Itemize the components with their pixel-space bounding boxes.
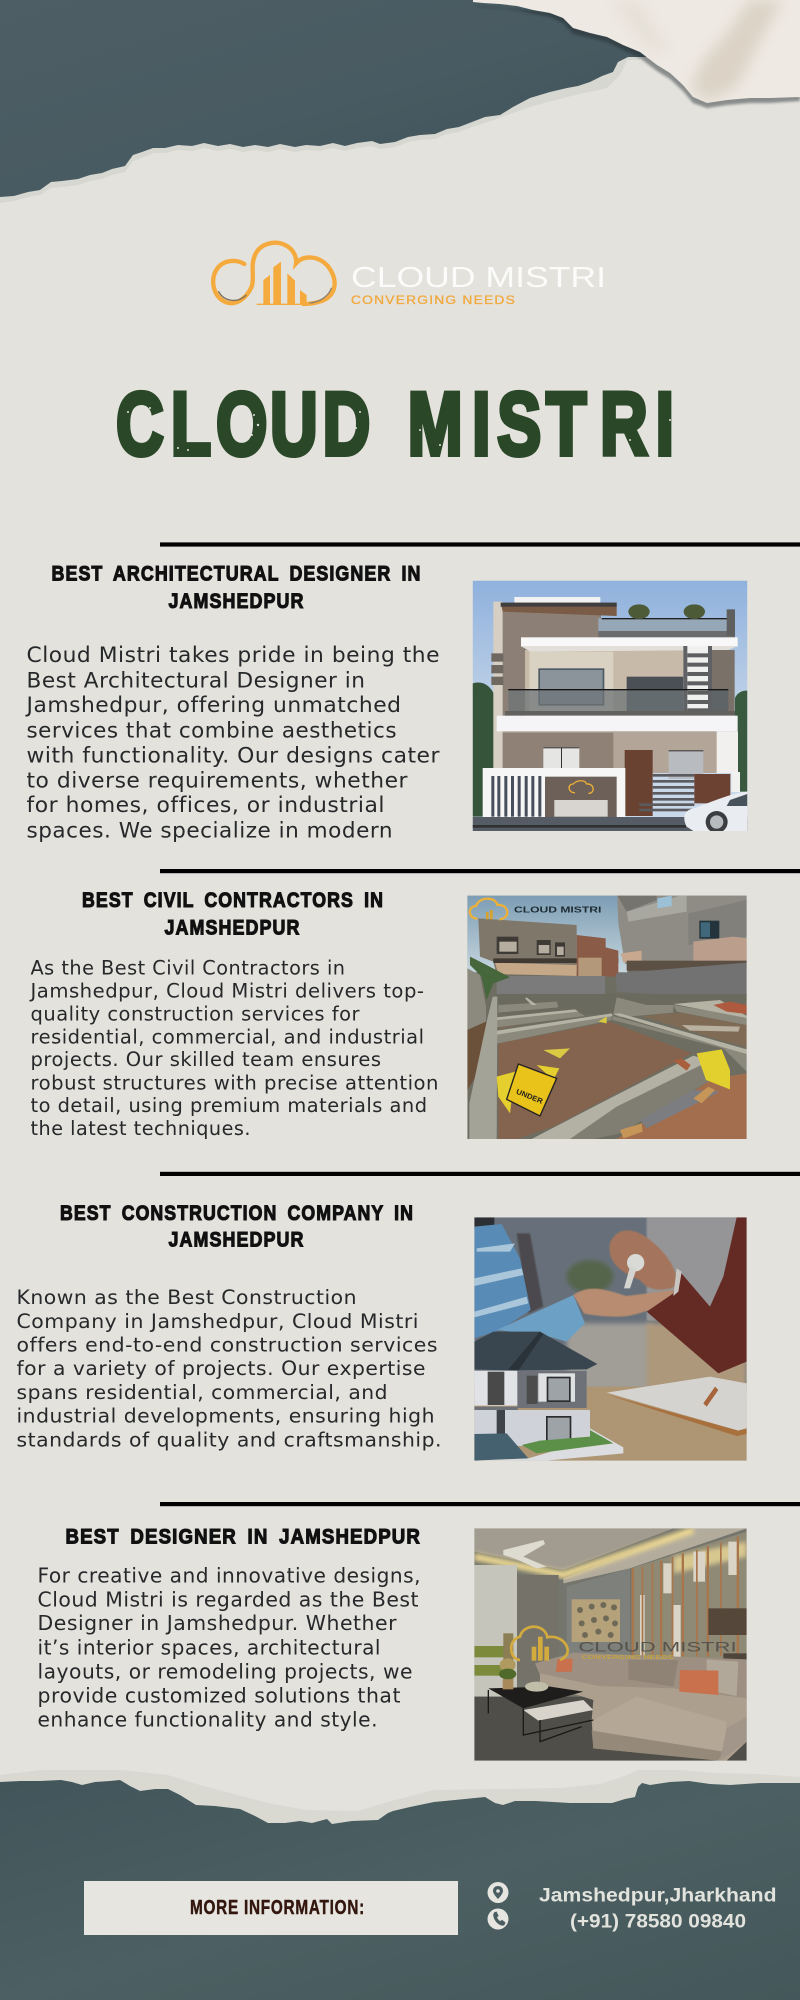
photo: living room interior: CONVERGING NEEDS bbox=[582, 1655, 674, 1661]
logo tagline: CONVERGING NEEDS bbox=[351, 295, 516, 307]
heading: architectural designer: JAMSHEDPUR bbox=[168, 589, 304, 613]
text block: designer: Cloud Mistri is regarded as the Best bbox=[38, 1588, 419, 1612]
text block: architectural designer bbox=[24, 643, 440, 843]
contact details bbox=[539, 1886, 776, 1933]
heading: architectural designer bbox=[52, 561, 422, 613]
text block: construction company: spans residential, commercial, and bbox=[16, 1381, 388, 1404]
text block: construction company: for a variety of projects. Our expertise bbox=[16, 1357, 426, 1380]
text block: architectural designer: with functionality. Our designs cater bbox=[26, 743, 440, 767]
photo: living room interior: CLOUD MISTRI bbox=[578, 1639, 737, 1655]
logo wordmark: CLOUD MISTRI bbox=[351, 262, 606, 294]
more information box bbox=[84, 1881, 458, 1935]
photo: house keys handover bbox=[474, 1217, 747, 1461]
heading: designer: BEST DESIGNER IN JAMSHEDPUR bbox=[66, 1525, 421, 1549]
title: CLOUD bbox=[116, 374, 370, 474]
heading: civil contractors bbox=[82, 888, 384, 939]
text block: architectural designer: for homes, offices, or industrial bbox=[26, 793, 385, 817]
text block: civil contractors bbox=[29, 956, 439, 1140]
text block: civil contractors: to detail, using premium materials and bbox=[30, 1094, 428, 1117]
text block: designer: layouts, or remodeling projects, we bbox=[38, 1659, 413, 1683]
heading: construction company bbox=[60, 1201, 414, 1252]
text block: construction company: standards of quality and craftsmanship. bbox=[16, 1428, 442, 1452]
text block: civil contractors: robust structures with precise attention bbox=[30, 1071, 439, 1094]
icon: phone bbox=[488, 1908, 508, 1930]
text block: civil contractors: Jamshedpur, Cloud Mistri delivers top- bbox=[29, 980, 425, 1003]
torn paper footer bbox=[0, 1770, 800, 2000]
icon: cloud with buildings bbox=[213, 243, 335, 305]
text block: construction company: Known as the Best Construction bbox=[16, 1286, 357, 1309]
more information label: MORE INFORMATION: bbox=[190, 1897, 365, 1919]
photo: construction site bbox=[467, 896, 747, 1139]
heading: civil contractors: JAMSHEDPUR bbox=[164, 915, 300, 939]
text block: designer: provide customized solutions that bbox=[38, 1683, 401, 1707]
torn paper header bbox=[0, 0, 800, 203]
title bbox=[116, 374, 674, 474]
heading: construction company: BEST CONSTRUCTION COMPANY IN bbox=[60, 1201, 414, 1225]
logo bbox=[213, 243, 606, 307]
heading: construction company: JAMSHEDPUR bbox=[168, 1228, 304, 1252]
text block: civil contractors: the latest techniques. bbox=[30, 1117, 251, 1140]
contact details: (+91) 78580 09840 bbox=[570, 1912, 746, 1933]
panel: construction company bbox=[16, 1172, 800, 1461]
text block: designer: Designer in Jamshedpur. Whether bbox=[38, 1611, 397, 1635]
heading: civil contractors: BEST CIVIL CONTRACTORS IN bbox=[82, 888, 384, 912]
text block: architectural designer: spaces. We specialize in modern bbox=[26, 819, 393, 843]
text block: construction company: offers end-to-end construction services bbox=[16, 1333, 438, 1356]
panel: architectural designer bbox=[24, 542, 800, 843]
text block: civil contractors: residential, commercial, and industrial bbox=[30, 1025, 424, 1048]
text block: architectural designer: services that combine aesthetics bbox=[26, 719, 397, 743]
text block: designer: For creative and innovative designs, bbox=[38, 1563, 421, 1587]
text block: civil contractors: quality construction services for bbox=[30, 1002, 360, 1025]
text block: civil contractors: As the Best Civil Contractors in bbox=[30, 956, 346, 979]
text block: designer bbox=[38, 1563, 421, 1732]
text block: architectural designer: Jamshedpur, offering unmatched bbox=[24, 693, 402, 717]
icon: location pin bbox=[488, 1882, 508, 1903]
text block: construction company: industrial developments, ensuring high bbox=[16, 1404, 435, 1427]
photo: living room interior bbox=[474, 1528, 747, 1761]
text block: civil contractors: projects. Our skilled team ensures bbox=[30, 1048, 382, 1071]
text block: construction company bbox=[16, 1286, 442, 1452]
text block: construction company: Company in Jamshedpur, Cloud Mistri bbox=[16, 1310, 419, 1333]
text block: architectural designer: Cloud Mistri takes pride in being the bbox=[26, 643, 440, 667]
photo: construction site: UNDER bbox=[515, 1087, 545, 1106]
text block: architectural designer: to diverse requirements, whether bbox=[26, 768, 408, 792]
panel: designer bbox=[38, 1502, 800, 1761]
heading: architectural designer: BEST ARCHITECTURAL DESIGNER IN bbox=[52, 561, 422, 585]
title: MISTRI bbox=[408, 374, 674, 474]
panel: civil contractors bbox=[29, 869, 800, 1140]
photo: construction site: CLOUD MISTRI bbox=[514, 905, 601, 915]
text block: architectural designer: Best Architectural Designer in bbox=[26, 668, 366, 692]
contact details: Jamshedpur,Jharkhand bbox=[539, 1886, 776, 1907]
photo: modern house bbox=[473, 581, 747, 833]
text block: designer: it’s interior spaces, architectural bbox=[38, 1635, 381, 1659]
text block: designer: enhance functionality and style. bbox=[38, 1708, 378, 1732]
